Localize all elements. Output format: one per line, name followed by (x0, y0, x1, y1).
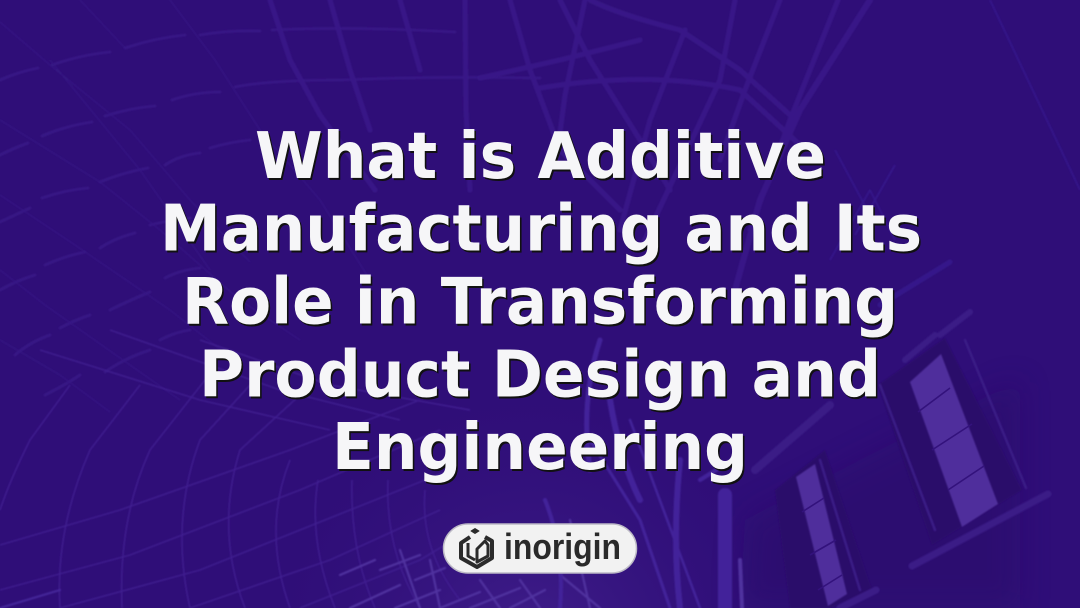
icon: inorigin hexagon cube (461, 528, 492, 567)
main title (160, 120, 924, 487)
main title: Role in Transforming (182, 266, 898, 340)
main title: Role in Transforming (184, 267, 900, 341)
roof lattice, bottom mesh (0, 330, 470, 608)
wordmark: inorigin (504, 526, 621, 567)
main title: What is Additive (255, 120, 826, 194)
main title: Product Design and (201, 340, 883, 414)
main title: Manufacturing and Its (162, 194, 924, 268)
main title: Engineering (334, 413, 750, 487)
window ledges and frames (755, 262, 1048, 608)
main title: What is Additive (257, 122, 828, 196)
windows (796, 354, 998, 606)
main title: Product Design and (199, 338, 881, 412)
dark building wall (740, 338, 1022, 608)
main title: Manufacturing and Its (160, 192, 922, 266)
columns and curved trusses (545, 340, 742, 608)
roof lattice, upper centre struts (270, 0, 870, 290)
roof lattice, upper left highlights (0, 28, 540, 395)
main title: Engineering (332, 411, 748, 485)
logo badge (444, 524, 636, 573)
